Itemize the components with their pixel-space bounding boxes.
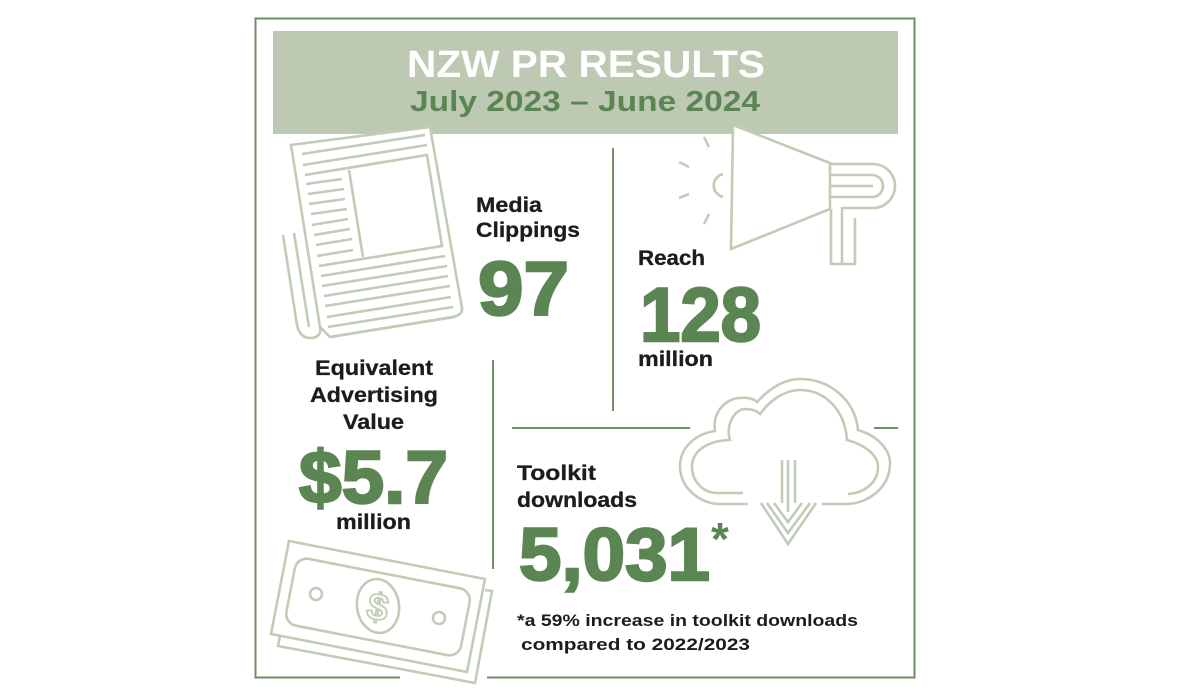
asterisk: *: [711, 513, 729, 565]
panel: equivalent advertising value: Advertising: [310, 384, 438, 407]
icon: megaphone: [679, 125, 895, 264]
panel: media clippings: [283, 127, 580, 338]
date range: July 2023 – June 2024: [410, 86, 760, 118]
footnote: [517, 612, 858, 654]
panel: reach: [638, 125, 895, 371]
panel: toolkit downloads: downloads: [517, 489, 637, 512]
label: million: million: [638, 348, 713, 371]
label: equivalent advertising value: Equivalent: [315, 357, 433, 380]
icon: cloud download: [680, 379, 890, 544]
label: media clippings: Media: [476, 194, 542, 217]
panel: media clippings: Clippings: [476, 219, 580, 242]
divider: toolkit top: [512, 427, 898, 429]
footnote: *a 59% increase in toolkit downloads: [517, 612, 858, 630]
panel: toolkit downloads: [517, 379, 890, 654]
panel: equivalent advertising value: [271, 357, 492, 683]
divider: advertising right: [492, 360, 494, 569]
panel: equivalent advertising value: Value: [343, 411, 404, 434]
icon: newspaper: [283, 127, 462, 338]
label: million: million: [336, 511, 411, 534]
number: $5.7: $5.7: [299, 436, 448, 519]
title: NZW PR RESULTS: [407, 44, 765, 86]
label: reach: Reach: [638, 247, 705, 270]
footnote: compared to 2022/2023: [521, 636, 750, 654]
divider: reach left: [612, 148, 614, 411]
label: toolkit downloads: Toolkit: [517, 462, 596, 485]
number: 5,031: 5,031: [519, 513, 710, 596]
icon: banknotes: $: [363, 585, 392, 631]
number: 128: 128: [640, 273, 761, 358]
number: 97: 97: [478, 247, 569, 332]
header banner: [273, 31, 898, 134]
outer frame: [256, 18, 914, 678]
icon: banknotes: [271, 541, 492, 683]
